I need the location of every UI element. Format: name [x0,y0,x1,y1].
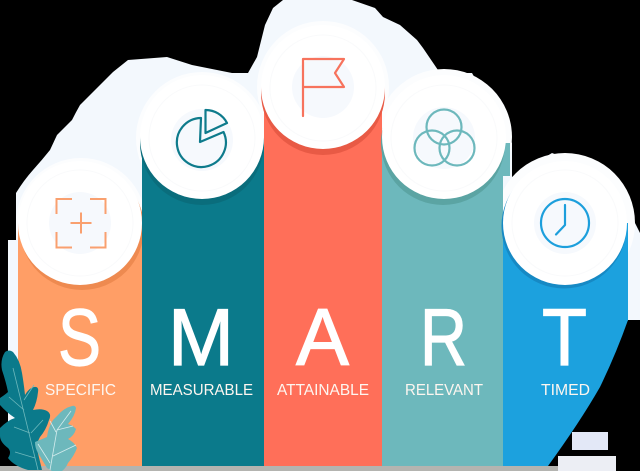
icon: flag [303,59,344,116]
icon: clock [541,199,589,247]
label: relevant: RELEVANT [405,382,483,399]
letter M: M [168,293,234,383]
label: measurable: MEASURABLE [150,382,253,399]
column: specific [18,161,144,466]
column: timed [502,161,628,466]
icon: target brackets [56,199,106,248]
leaf: large teal [0,350,50,470]
blob fragment: bottom right lower [558,456,616,471]
leaf: small aqua [35,406,77,471]
label: specific: SPECIFIC [45,382,116,399]
letter R: R [420,293,467,383]
column: attainable [261,25,385,466]
blob fragment: bottom right upper [572,432,608,450]
letter A: A [296,293,349,383]
column: relevant [381,75,510,466]
letter S: S [58,293,101,383]
column: measurable [140,75,264,466]
bottom shadow strip [0,466,558,471]
circle halos [16,21,635,293]
label: timed: TIMED [541,382,590,399]
label: attainable: ATTAINABLE [277,382,369,399]
icon: overlapping circles [414,110,474,166]
letter T: T [542,293,587,383]
icon: pie chart [177,110,227,167]
